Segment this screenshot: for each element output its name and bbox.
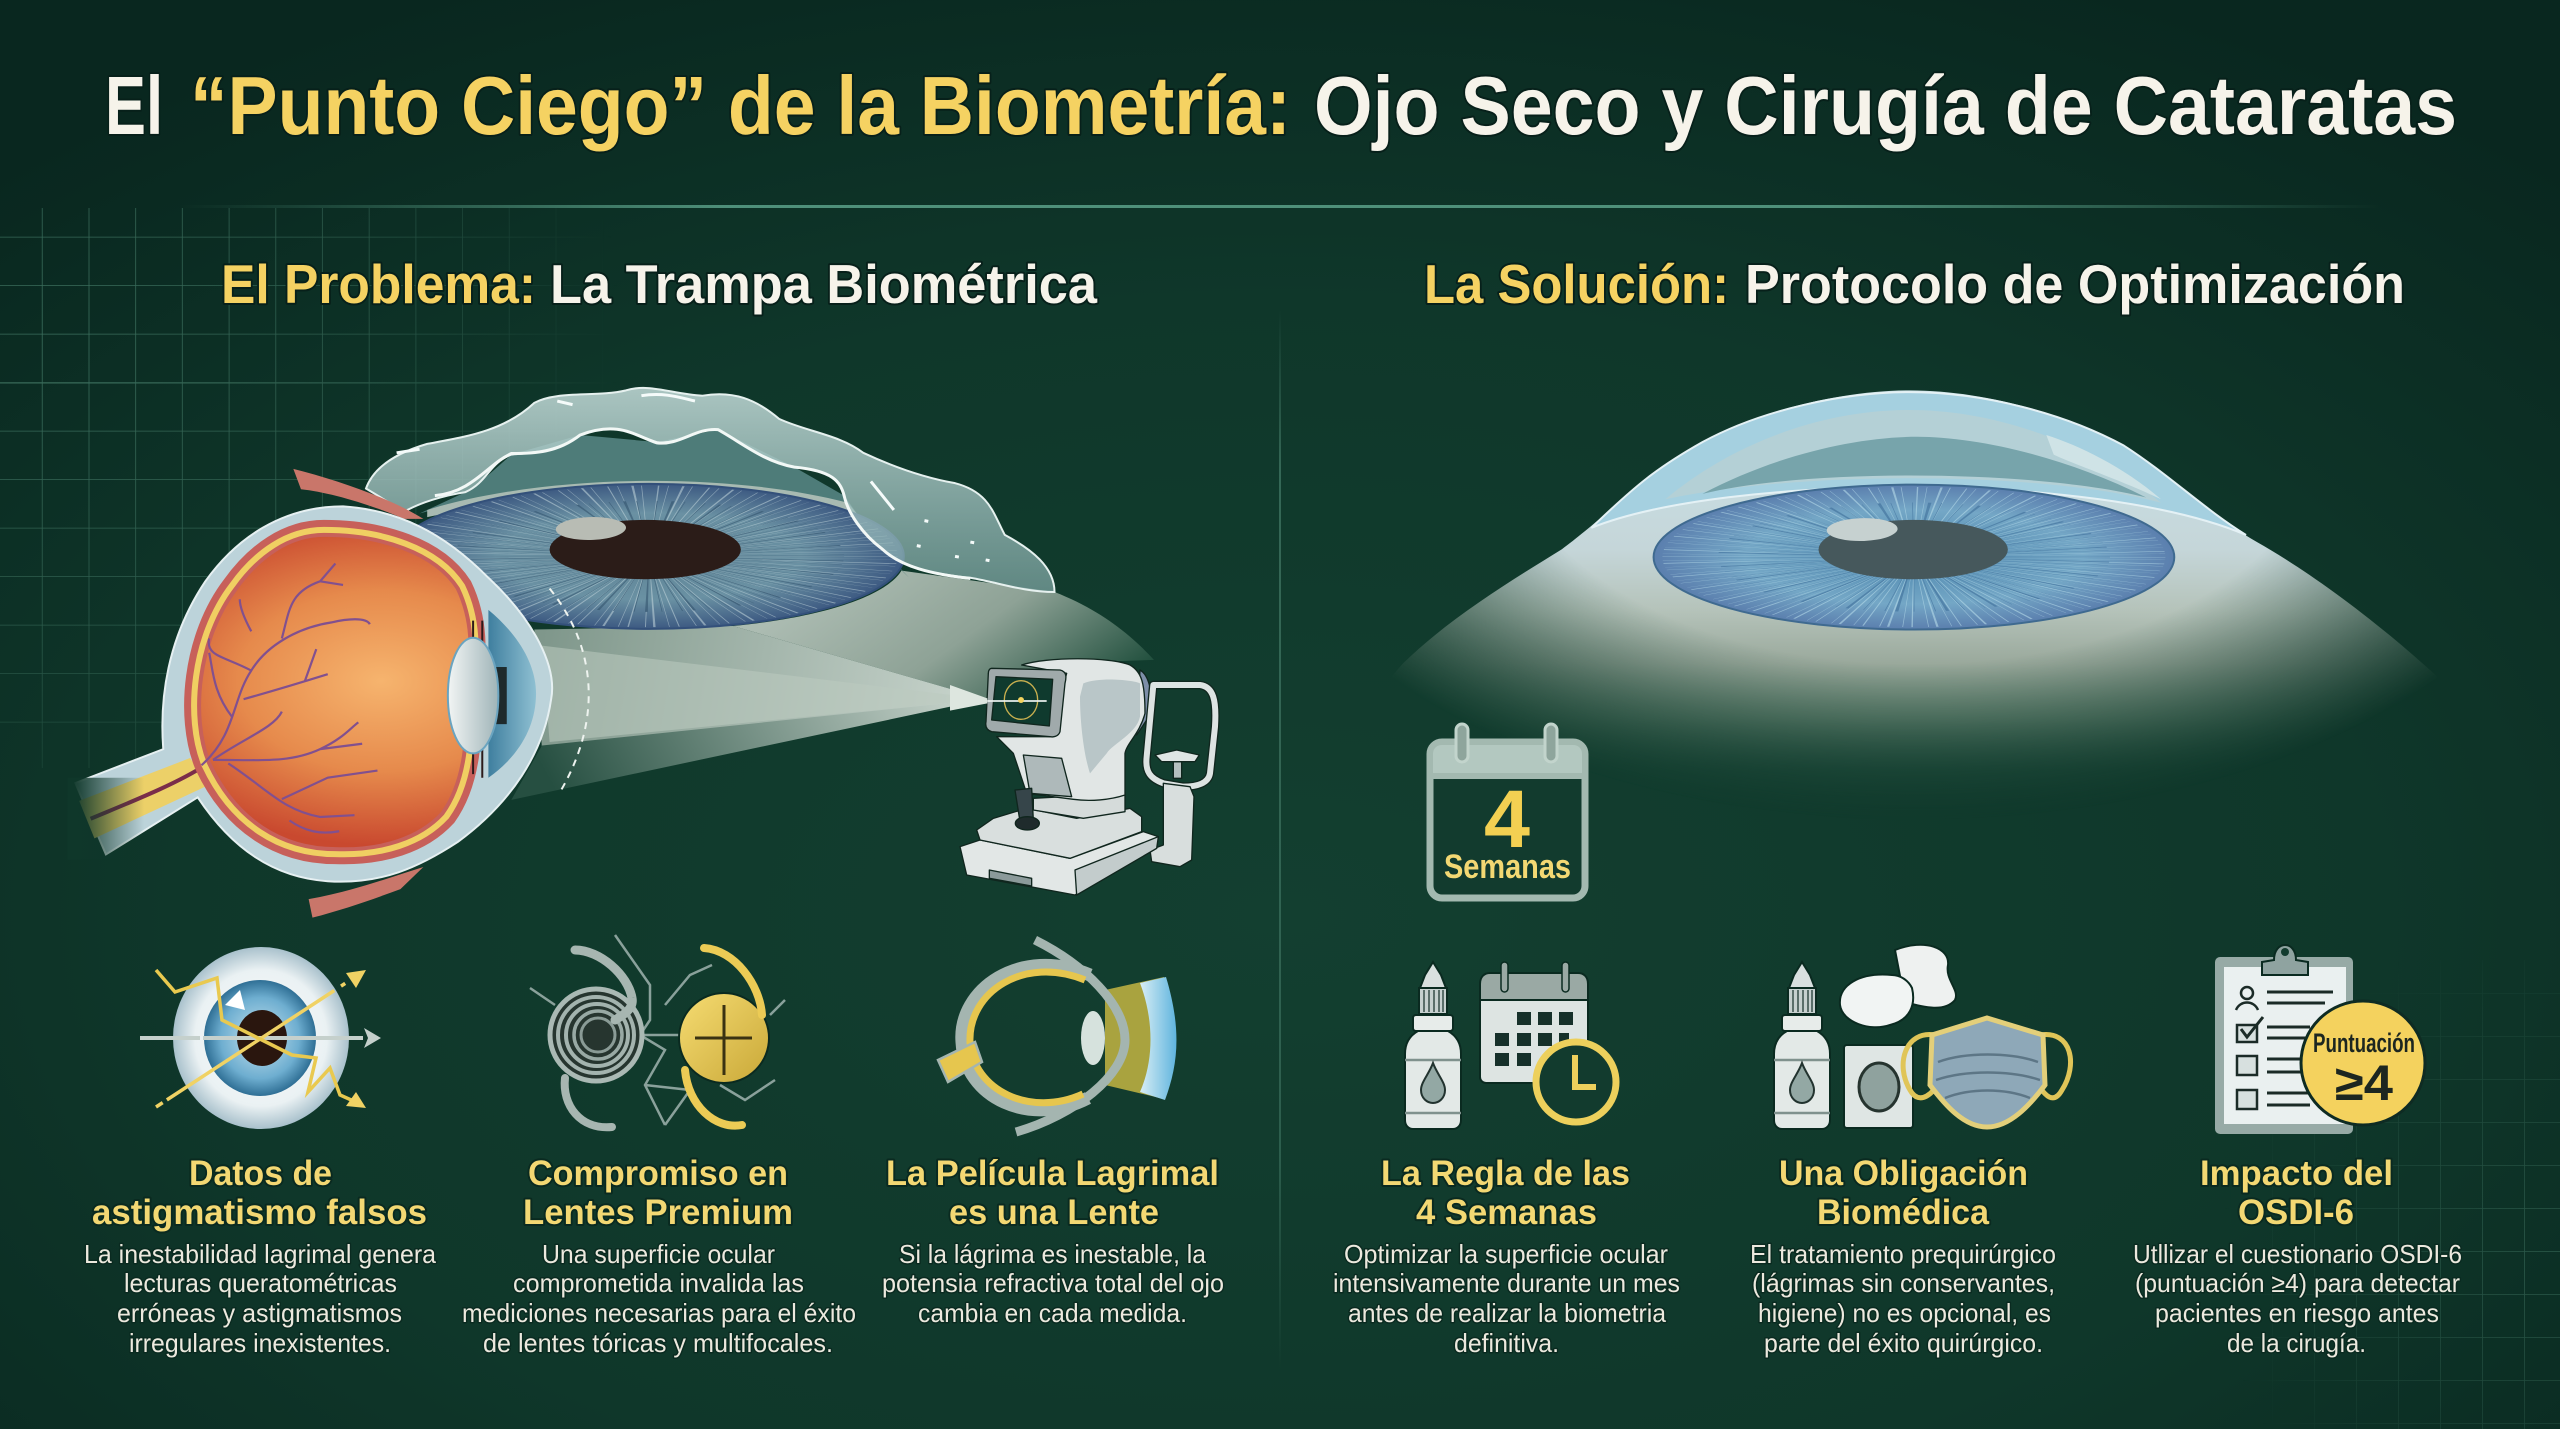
heading: OSDI-6 (2238, 1193, 2354, 1232)
body text: (puntuación ≥4) para detectar (2135, 1268, 2460, 1298)
eye bulb (1400, 390, 2429, 774)
heading: Compromiso en (528, 1154, 788, 1193)
icon: keratometer device (950, 659, 1215, 895)
heading (92, 1154, 427, 1232)
body text: lecturas queratométricas (124, 1268, 397, 1298)
icon: four-week calendar: Semanas (1444, 848, 1571, 886)
body text: Optimizar la superficie ocular (1344, 1239, 1668, 1269)
body text: pacientes en riesgo antes (2155, 1298, 2439, 1328)
body text: Si la lágrima es inestable, la (899, 1239, 1207, 1269)
scleral surface and light beam (511, 571, 1154, 800)
icon: four-week calendar: 4 (1484, 774, 1530, 865)
body text: El tratamiento prequirúrgico (1750, 1239, 2056, 1269)
body text (84, 1239, 437, 1358)
body text: (lágrimas sin conservantes, (1752, 1268, 2055, 1298)
body text: Una superficie ocular (542, 1239, 775, 1269)
body text (1750, 1239, 2056, 1358)
heading: Biomédica (1817, 1193, 1990, 1232)
heading: astigmatismo falsos (92, 1193, 427, 1232)
body text (2133, 1239, 2462, 1358)
panel heading: solution (1424, 253, 2405, 315)
panel heading: solution: La Solución: (1424, 253, 1729, 315)
heading: Lentes Premium (523, 1193, 793, 1232)
retinal vessels (202, 563, 377, 833)
column: four-week rule (1333, 962, 1680, 1358)
title (105, 59, 2457, 152)
heading (523, 1154, 793, 1232)
body text: potensia refractiva total del ojo (882, 1268, 1224, 1298)
heading (1779, 1154, 2028, 1232)
body text: antes de realizar la biometria (1348, 1298, 1667, 1328)
cornea and lens (488, 610, 536, 778)
muscle bottom (309, 867, 423, 918)
body text: cambia en cada medida. (918, 1298, 1187, 1328)
illustration: optimized healthy eye (1400, 390, 2429, 774)
muscle top (293, 469, 423, 519)
column: premium lenses (462, 935, 856, 1358)
body text: comprometida invalida las (513, 1268, 804, 1298)
body text: erróneas y astigmatismos (117, 1298, 402, 1328)
heading (1381, 1154, 1630, 1232)
body text: parte del éxito quirúrgico. (1764, 1328, 2043, 1358)
heading: Una Obligación (1779, 1154, 2028, 1193)
iris with pupil (394, 484, 904, 629)
column: false astigmatism (84, 947, 437, 1358)
tear-filled cornea dome (1591, 392, 2246, 535)
body text: intensivamente durante un mes (1333, 1268, 1680, 1298)
heading: La Película Lagrimal (886, 1154, 1219, 1193)
icon: clipboard with score badge (2215, 945, 2425, 1134)
column: biomedical obligation (1750, 945, 2071, 1358)
title: “Punto Ciego” de la Biometría: (190, 59, 1291, 152)
body text: de lentes tóricas y multifocales. (483, 1328, 833, 1358)
body text (462, 1239, 856, 1358)
title: Ojo Seco y Cirugía de Cataratas (1314, 59, 2457, 152)
dashed measuring line (550, 588, 589, 790)
body text: La inestabilidad lagrimal genera (84, 1239, 437, 1269)
panel heading: problem: La Trampa Biométrica (550, 253, 1097, 315)
heading: La Regla de las (1381, 1154, 1630, 1193)
heading: 4 Semanas (1416, 1193, 1597, 1232)
icon: drops, cotton pads, wipe and mask (1774, 945, 2071, 1129)
body text: higiene) no es opcional, es (1758, 1298, 2051, 1328)
heading: es una Lente (949, 1193, 1159, 1232)
heading (2200, 1154, 2393, 1232)
panel heading: problem: El Problema: (221, 253, 536, 315)
body text: de la cirugía. (2227, 1328, 2366, 1358)
icon: intraocular lenses with cracks (530, 935, 785, 1127)
body text: irregulares inexistentes. (129, 1328, 391, 1358)
body text: Utllizar el cuestionario OSDI-6 (2133, 1239, 2462, 1269)
body text (1333, 1239, 1680, 1358)
icon: four-week calendar (1430, 724, 1585, 898)
icon: eye with tear film lens (938, 940, 1176, 1132)
sagittal eye cross-section (68, 506, 552, 882)
tear film (366, 388, 1054, 592)
panel heading: solution: Protocolo de Optimización (1745, 253, 2405, 315)
body text: mediciones necesarias para el éxito (462, 1298, 856, 1328)
heading: Datos de (189, 1154, 332, 1193)
icon: eye with distorted axes (140, 947, 381, 1129)
icon: clipboard with score badge: Puntuación (2313, 1028, 2415, 1058)
illustration: dry eye with unstable tear film and sagittal eye (68, 388, 1154, 918)
column: tear film lens (882, 940, 1224, 1328)
column: OSDI-6 impact (2133, 945, 2462, 1358)
title: El (105, 59, 163, 152)
heading (886, 1154, 1219, 1232)
heading: Impacto del (2200, 1154, 2393, 1193)
anterior chamber under tear film (420, 430, 909, 578)
iris with pupil (1654, 485, 2174, 630)
icon: drops bottle, calendar and clock (1405, 962, 1616, 1129)
panel heading: problem (221, 253, 1097, 315)
body text (882, 1239, 1224, 1328)
body text: definitiva. (1454, 1328, 1559, 1358)
icon: clipboard with score badge: ≥4 (2335, 1055, 2393, 1111)
